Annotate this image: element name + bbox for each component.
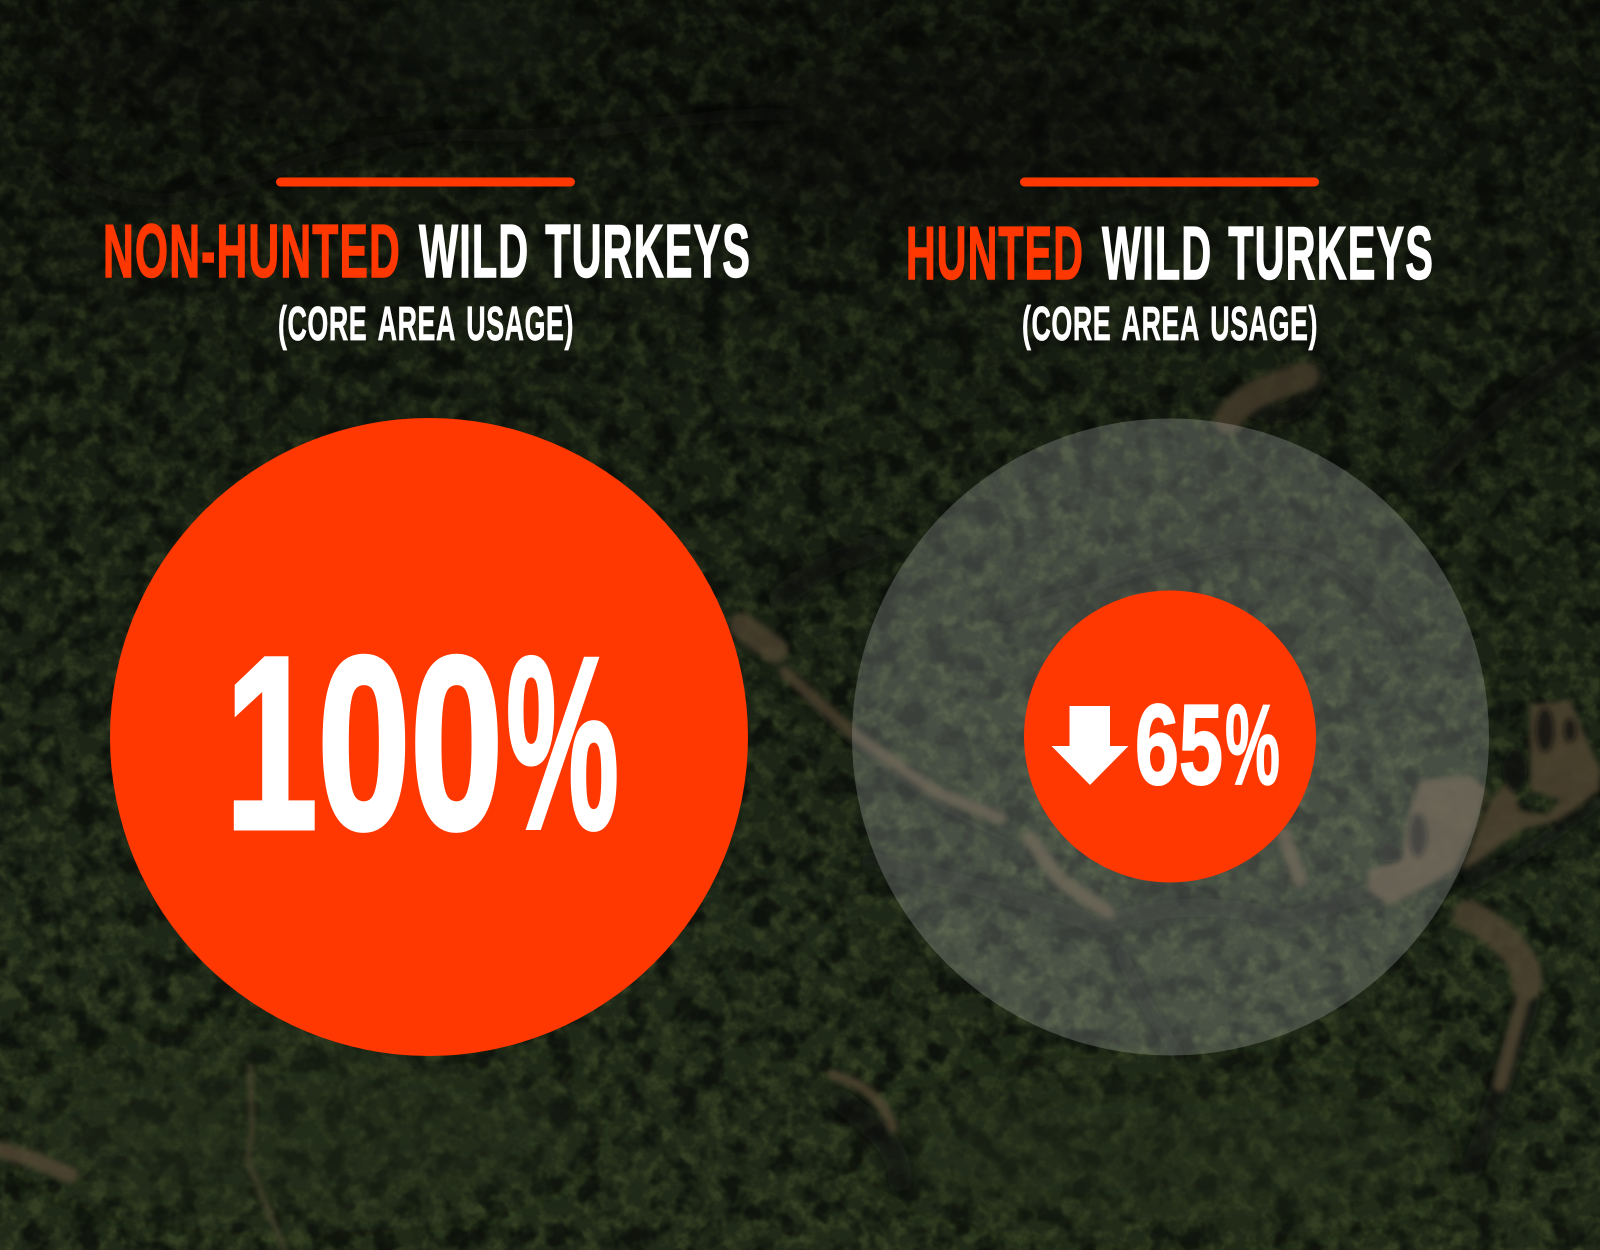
subheading left: (CORE AREA USAGE) xyxy=(278,298,574,351)
large orange circle 100% xyxy=(110,418,748,1056)
heading: non-hunted wild turkeys: NON-HUNTED xyxy=(103,209,401,293)
orange circle reduced area xyxy=(1024,590,1316,882)
panel: hunted wild turkeys xyxy=(852,178,1489,1056)
value: 100%: % xyxy=(506,606,619,881)
accent bar left xyxy=(276,178,575,186)
value: 100%: 100 xyxy=(225,606,503,881)
value: 65%: % xyxy=(1225,682,1280,809)
subheading right: (CORE AREA USAGE) xyxy=(1022,298,1318,351)
value: 65%: 65 xyxy=(1135,682,1223,809)
accent bar right xyxy=(1020,178,1319,186)
panel: non-hunted wild turkeys xyxy=(103,178,751,1056)
heading: non-hunted wild turkeys: WILD TURKEYS xyxy=(419,209,751,293)
heading: hunted wild turkeys: HUNTED xyxy=(906,211,1084,295)
translucent reference circle xyxy=(852,418,1489,1056)
heading: hunted wild turkeys xyxy=(906,211,1434,295)
icon: down arrow xyxy=(1052,706,1128,785)
